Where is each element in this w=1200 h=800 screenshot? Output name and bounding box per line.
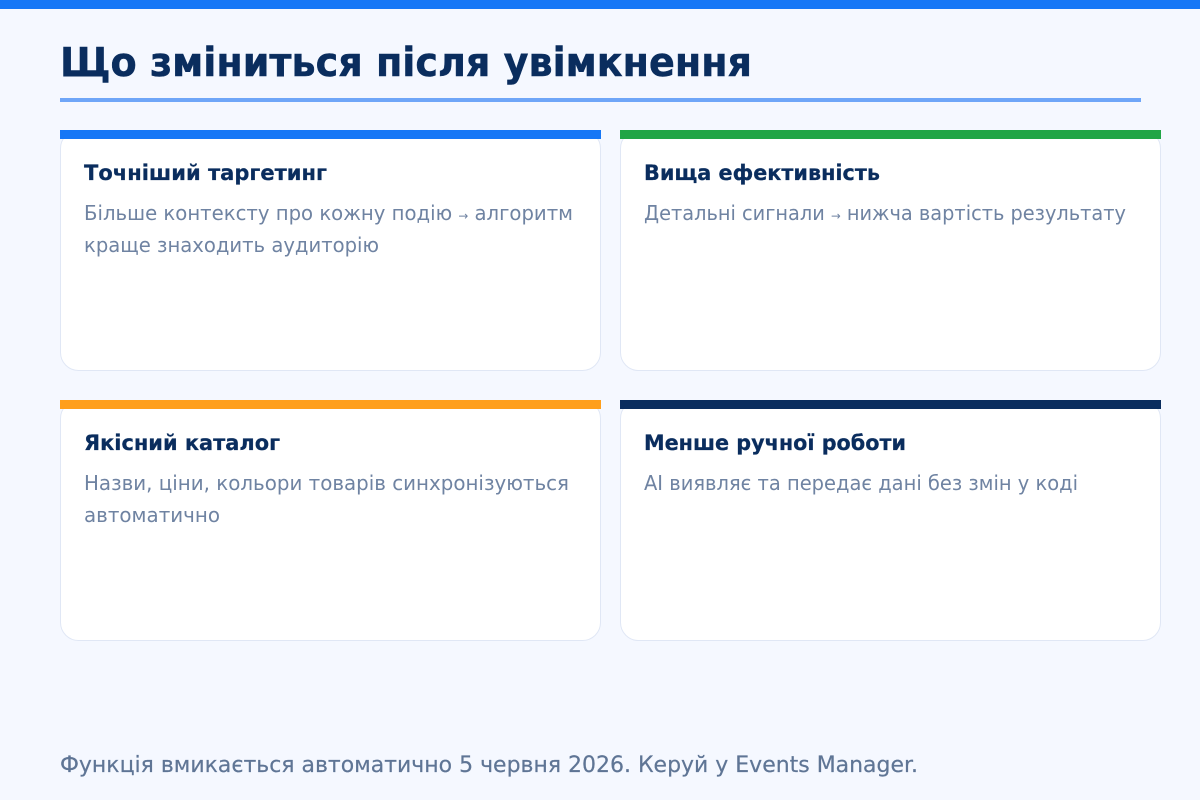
- text: quality catalog: автоматично: [84, 503, 220, 527]
- title underline: [60, 98, 1141, 102]
- top accent bar: [0, 0, 1200, 9]
- text: precise targeting: [84, 201, 573, 257]
- text: higher efficiency: Детальні сигнали → нижча вартість результату: [644, 201, 1126, 225]
- panel: precise targeting: [60, 130, 601, 370]
- heading: higher efficiency: Вища ефективність: [644, 161, 880, 185]
- text: less manual work: AI виявляє та передає дані без змін у коді: [644, 471, 1078, 495]
- footer note: Функція вмикається автоматично 5 червня 2026. Керуй у Events Manager.: [60, 753, 918, 778]
- text: precise targeting: Більше контексту про кожну подію → алгоритм: [84, 201, 573, 225]
- heading: less manual work: Менше ручної роботи: [644, 431, 906, 455]
- heading: quality catalog: Якісний каталог: [84, 431, 280, 455]
- heading: precise targeting: Точніший таргетинг: [84, 161, 327, 185]
- text: quality catalog: [84, 471, 569, 527]
- text: precise targeting: краще знаходить аудиторію: [84, 233, 379, 257]
- title: Що зміниться після увімкнення: [60, 40, 752, 86]
- text: quality catalog: Назви, ціни, кольори товарів синхронізуються: [84, 471, 569, 495]
- panel: less manual work: [620, 400, 1161, 640]
- panel: quality catalog: [60, 400, 601, 640]
- panel: higher efficiency: [620, 130, 1161, 370]
